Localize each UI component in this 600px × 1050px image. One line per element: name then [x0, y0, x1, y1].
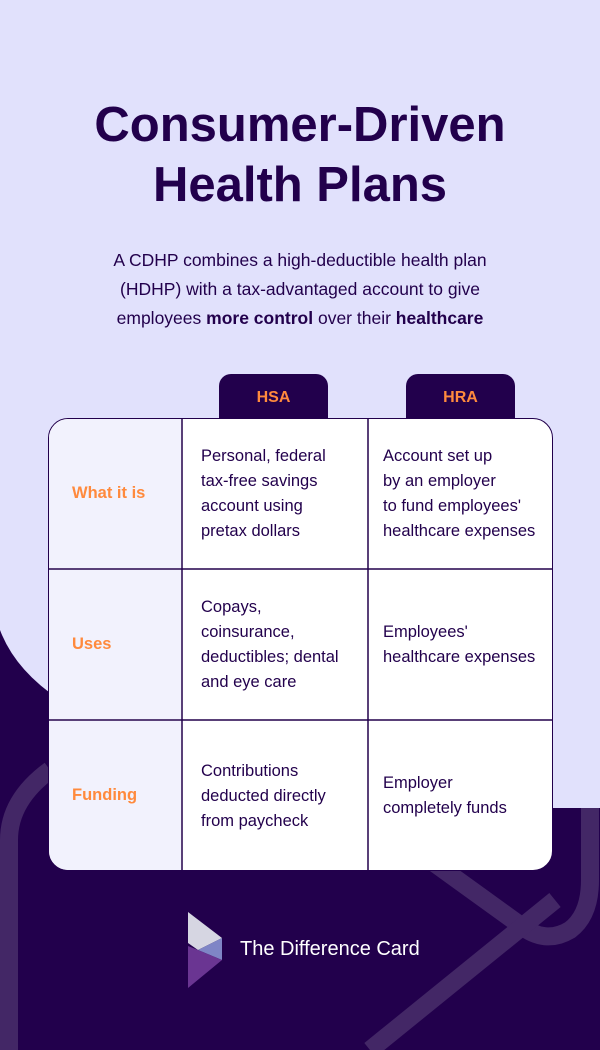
cell: HRA funding: completely funds	[383, 799, 507, 817]
cell: HSA uses: deductibles; dental and eye care	[201, 648, 339, 691]
row label: What it is	[49, 419, 181, 568]
subtitle	[113, 250, 487, 328]
row label: Uses	[49, 570, 181, 719]
logo	[188, 912, 420, 988]
subtitle: (HDHP) with a tax-advantaged account to give	[120, 279, 480, 299]
cell: HRA uses: Employees'	[383, 623, 468, 641]
title: Health Plans	[153, 158, 447, 212]
cell: HSA funding: Contributions deducted directly from paycheck	[201, 762, 326, 830]
cell: HRA uses: healthcare expenses	[383, 648, 535, 666]
comparison table	[48, 418, 553, 871]
cell: HRA what: by an employer	[383, 472, 496, 490]
tab: HSA: HSA	[257, 389, 290, 406]
cell: HRA uses	[383, 623, 535, 666]
logo text: The Difference Card	[240, 938, 420, 960]
tab: HRA	[406, 374, 515, 418]
cell: HRA what: Account set up	[383, 447, 492, 465]
cell: HSA what: Personal, federal tax-free savings account using pretax dollars	[201, 447, 326, 540]
row label: What it is: What it is	[72, 484, 145, 502]
subtitle: employees more control over their healthcare	[117, 308, 483, 328]
row label: Funding	[49, 721, 181, 870]
subtitle: A CDHP combines a high-deductible health plan	[113, 250, 487, 270]
cell: HSA uses: Copays,	[201, 598, 262, 616]
row label: Funding: Funding	[72, 786, 137, 804]
cell: HRA what	[383, 447, 535, 540]
cell: HRA what: to fund employees' healthcare expenses	[383, 497, 535, 540]
cell: HRA funding: Employer	[383, 774, 453, 792]
title: Consumer-Driven	[94, 98, 506, 152]
cell: HSA uses	[201, 598, 339, 691]
cell: HRA funding	[383, 774, 507, 817]
tab: HSA	[219, 374, 328, 418]
icon: logo mark	[188, 912, 222, 988]
row label: Uses: Uses	[72, 635, 111, 653]
tab: HRA: HRA	[443, 389, 478, 406]
title	[94, 98, 506, 212]
cell: HSA uses: coinsurance,	[201, 623, 295, 641]
